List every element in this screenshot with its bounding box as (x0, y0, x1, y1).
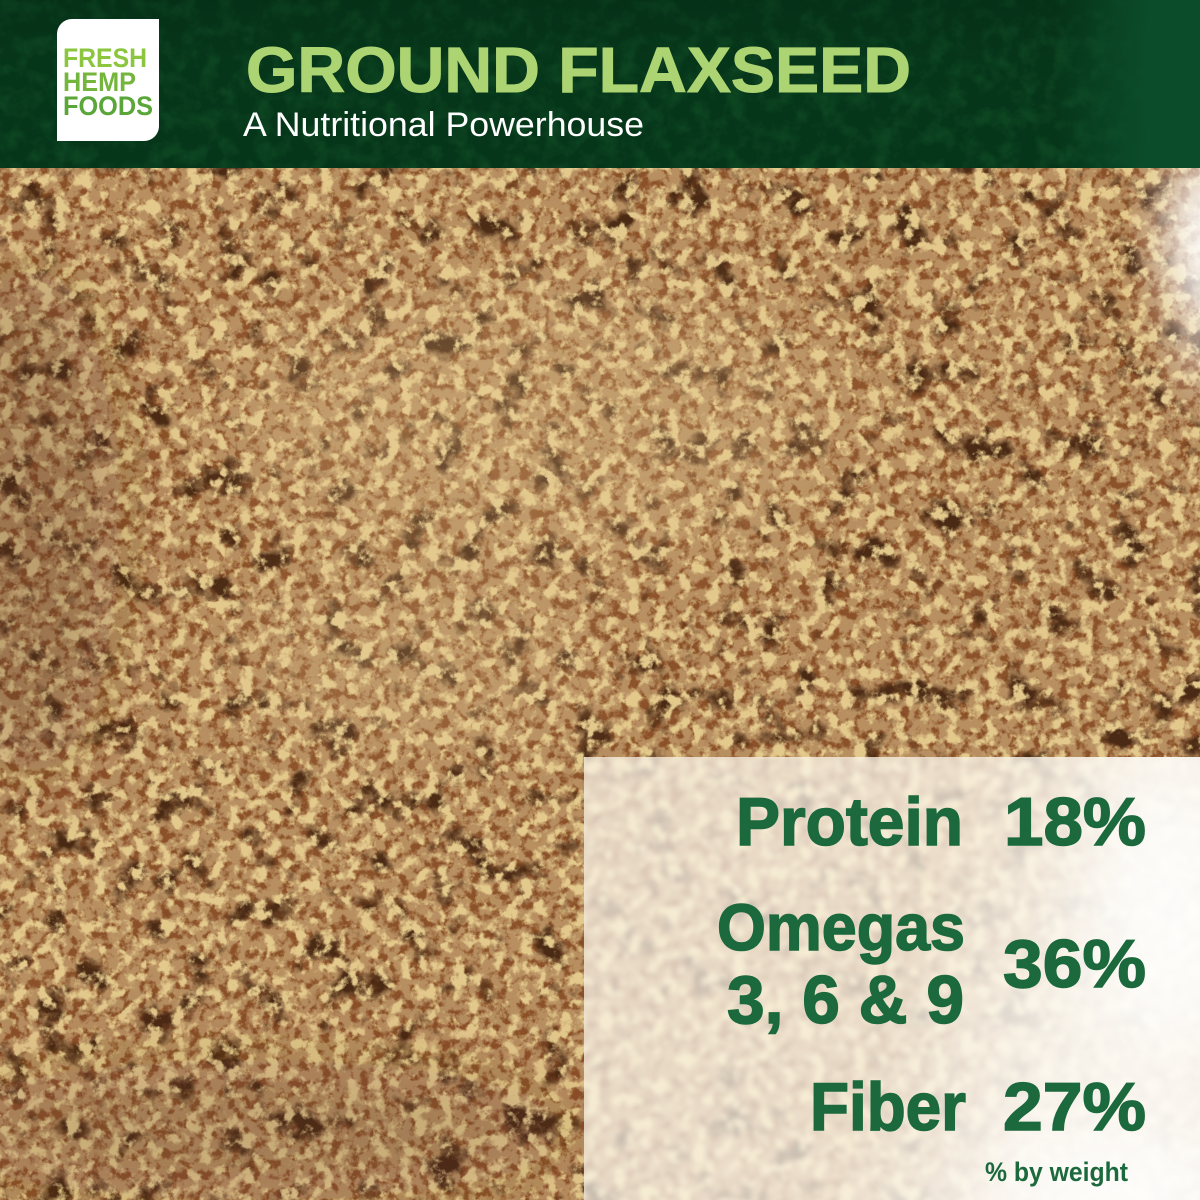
value: fiber percent: 27% (1003, 1069, 1146, 1145)
label: fiber: Fiber (810, 1069, 966, 1145)
logo: Fresh Hemp Foods: FOODS (63, 91, 153, 121)
logo: Fresh Hemp Foods: HEMP (63, 67, 136, 97)
logo: Fresh Hemp Foods (57, 19, 159, 141)
panel: nutrition facts (560, 740, 1200, 1200)
label: omegas types: 3, 6 & 9 (727, 962, 964, 1038)
footnote: by weight: % by weight (985, 1157, 1128, 1187)
label: protein: Protein (736, 784, 963, 860)
subtitle: A Nutritional Powerhouse (243, 106, 644, 144)
label: omegas: Omegas (717, 890, 965, 964)
header banner (0, 0, 1200, 168)
logo: Fresh Hemp Foods: FRESH (63, 43, 147, 73)
value: protein percent: 18% (1004, 784, 1146, 860)
title: GROUND FLAXSEED (246, 34, 911, 106)
value: omegas percent: 36% (1003, 926, 1146, 1002)
